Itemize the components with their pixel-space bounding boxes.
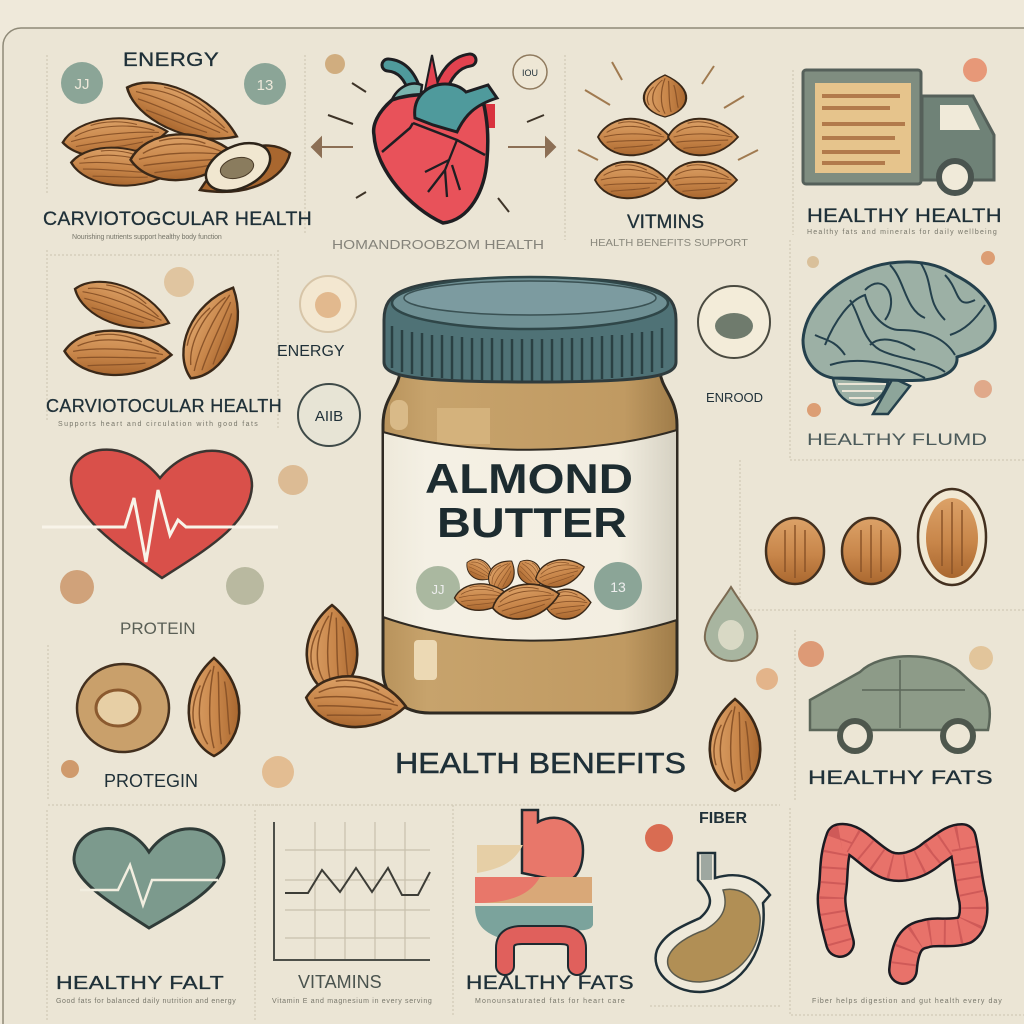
icon: stomach <box>656 853 770 992</box>
label: energy: ENERGY <box>277 343 345 360</box>
icon: almond pile <box>61 69 290 200</box>
label: enrood: ENROOD <box>706 390 763 405</box>
icon: almond slice <box>77 658 239 756</box>
panel: truck <box>803 58 1002 236</box>
caption: Vitamin E and magnesium in every serving <box>272 998 432 1005</box>
icon: three kernels <box>766 489 986 585</box>
jar body <box>383 372 677 713</box>
panel: car <box>756 641 993 789</box>
panel: brain <box>698 251 995 449</box>
decor dots <box>60 465 308 605</box>
heading: vitamins: VITMINS <box>627 212 704 233</box>
heading: health benefits: HEALTH BENEFITS <box>395 748 686 780</box>
panel: stomach fiber <box>645 810 770 992</box>
small medallion: IOU <box>522 68 538 78</box>
labels beside jar <box>277 276 360 446</box>
heading: cardiovascular: CARVIOTOGCULAR HEALTH <box>43 209 312 230</box>
small medallion <box>325 54 547 89</box>
label badges: JJ <box>432 582 444 597</box>
heading: fiber: FIBER <box>699 810 747 827</box>
decor dots <box>61 756 294 788</box>
icon: anatomical heart <box>374 55 497 223</box>
heading: vitamins 2: VITAMINS <box>298 972 382 992</box>
panel: heartbeat <box>42 450 308 638</box>
caption: Good fats for balanced daily nutrition and energy <box>56 998 236 1005</box>
label <box>383 430 677 641</box>
label badges: 13 <box>610 579 626 595</box>
heading: energy: ENERGY <box>123 50 219 71</box>
heading: cardiovascular 2: CARVIOTOCULAR HEALTH <box>46 396 282 416</box>
caption: Monounsaturated fats for heart care <box>475 998 625 1005</box>
panel: almonds two <box>46 267 282 428</box>
icon: delivery truck <box>803 58 994 193</box>
line chart <box>274 822 430 960</box>
caption: Fiber helps digestion and gut health every day <box>812 998 1002 1005</box>
medallion: AIIB <box>315 408 343 425</box>
panel: energy almonds <box>43 50 312 241</box>
label almonds <box>454 554 592 625</box>
almond right of heading <box>710 699 760 791</box>
foreground almonds <box>304 605 408 731</box>
panel: stomach digestive <box>466 810 634 1005</box>
icon: brain <box>803 251 995 417</box>
caption: Nourishing nutrients support healthy body function <box>72 234 222 241</box>
title line 2: BUTTER <box>437 499 627 546</box>
heading: healthy health: HEALTHY HEALTH <box>807 206 1002 227</box>
panel: intestine <box>812 838 1002 1005</box>
heading: healthy fats: HEALTHY FATS <box>808 768 993 789</box>
icon: three almonds <box>64 267 254 388</box>
label badges <box>416 562 642 610</box>
icon: digestive diagram <box>475 810 593 966</box>
panel: heart anatomy <box>312 54 555 252</box>
icon: large intestine <box>832 838 974 970</box>
icon: red heart with pulse <box>42 450 278 578</box>
title: ALMOND <box>425 455 633 502</box>
dots <box>756 641 993 690</box>
icon: green heart <box>74 829 224 928</box>
heading: protein: PROTEIN <box>120 619 196 638</box>
heading: healthy fats 2: HEALTHY FATS <box>466 973 634 994</box>
panel: vitamins almonds <box>578 62 758 249</box>
medallion <box>300 276 356 332</box>
dot <box>645 824 673 852</box>
panel: chart <box>272 822 432 1005</box>
panel: green heart <box>56 829 236 1005</box>
badges: JJ <box>74 76 90 93</box>
badges <box>61 62 286 105</box>
caption: health: HOMANDROOBZOM HEALTH <box>332 237 544 252</box>
heading: healthy falt: HEALTHY FALT <box>56 973 224 993</box>
medallion <box>298 384 360 446</box>
heading: healthy fluid: HEALTHY FLUMD <box>807 430 987 449</box>
icon: car <box>810 656 990 751</box>
jar highlights <box>390 400 490 680</box>
caption: HEALTH BENEFITS SUPPORT <box>590 238 748 249</box>
lid <box>384 277 676 382</box>
badges: 13 <box>257 77 273 94</box>
icon: almond group <box>578 62 758 198</box>
heading: protein 2: PROTEGIN <box>104 771 198 791</box>
caption: Healthy fats and minerals for daily wellbeing <box>807 229 997 236</box>
panel: protein <box>61 658 294 791</box>
caption: Supports heart and circulation with good fats <box>58 421 258 428</box>
icon: seed medallion <box>698 286 770 358</box>
jar <box>383 277 677 713</box>
panel: almond kernels <box>705 489 986 661</box>
arrows <box>312 83 555 212</box>
icon: seed drop <box>705 587 757 661</box>
